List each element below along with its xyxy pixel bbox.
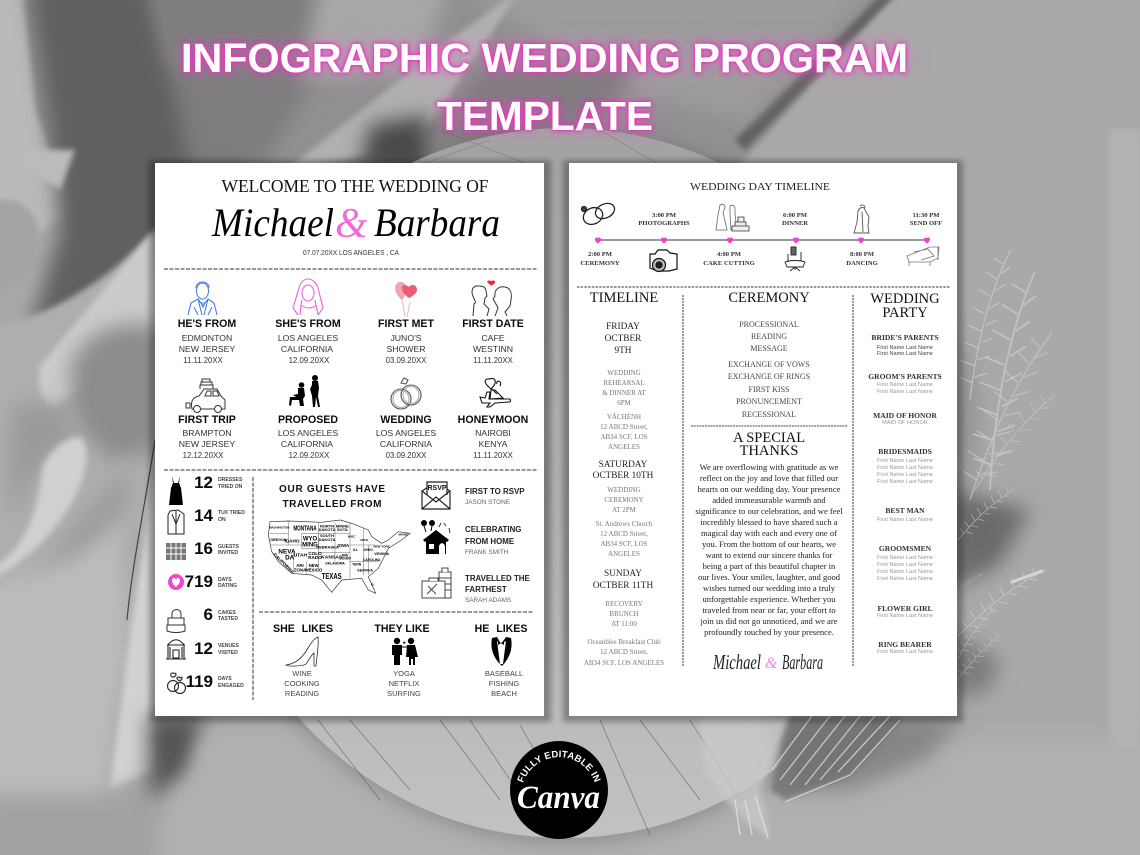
- icon: wedding rings: [391, 378, 421, 409]
- stat: tux tried on: 14: [194, 506, 214, 525]
- a special thanks: [695, 430, 843, 637]
- couple names: Barbara: [374, 200, 500, 245]
- column: timeline: AB34 SCF, LOS ANGELES: [584, 659, 664, 667]
- usa map: ZONA: [294, 568, 307, 573]
- they like: NETFLIX: [389, 679, 419, 688]
- stat: dresses tried on: 12: [194, 473, 213, 492]
- text: he's from: NEW JERSEY: [179, 344, 235, 354]
- text: first date: [462, 318, 524, 365]
- label: 2pm ceremony: [580, 251, 620, 267]
- stat: days dating: DATING: [218, 583, 237, 589]
- panel: right page, schedule: [569, 163, 957, 716]
- label: 6pm dinner: 6:00 PM: [783, 212, 808, 219]
- they like: YOGA: [393, 669, 415, 678]
- stat: days engaged: 119: [186, 672, 213, 691]
- text: travelled the farthest: FARTHEST: [465, 585, 507, 594]
- column: timeline: VÁCHÉNH: [607, 413, 641, 421]
- stat: days engaged: DAYS: [218, 676, 232, 682]
- label: 3pm photographs: 3:00 PM: [652, 212, 677, 219]
- text: she's from: LOS ANGELES: [278, 333, 338, 343]
- she likes: SHE LIKES: [273, 623, 333, 635]
- icon: bride: [293, 279, 323, 315]
- stat: guests invited: GUESTS: [218, 544, 240, 550]
- title: TEMPLATE: [437, 93, 653, 139]
- text: first met: [378, 318, 434, 365]
- usa map: SOURI: [339, 557, 351, 561]
- column: wedding party: First Name Last Name: [877, 345, 933, 351]
- column: wedding party: RING BEARER: [878, 640, 932, 649]
- stat: tux tried on: [168, 506, 245, 534]
- label: 6pm dinner: [782, 212, 808, 227]
- text: honeymoon: KENYA: [479, 439, 508, 449]
- column: ceremony: MESSAGE: [750, 344, 788, 353]
- text: travelled the farthest: [465, 574, 530, 604]
- stat: dresses tried on: TRIED ON: [218, 484, 243, 490]
- text: first to rsvp: JASON STONE: [465, 499, 510, 506]
- icon: rsvp envelope: RSVP: [427, 485, 447, 492]
- a special thanks: wishes turned our wedding into a truly: [703, 583, 836, 593]
- stat: days engaged: [168, 672, 244, 694]
- column: ceremony: CEREMONY: [728, 290, 810, 306]
- text: first trip: BRAMPTON: [182, 428, 232, 438]
- column: timeline: AT 2PM: [612, 506, 637, 514]
- he likes: BEACH: [491, 689, 517, 698]
- panel: left page, infographic: [155, 163, 544, 716]
- heading: welcome: WELCOME TO THE WEDDING OF: [222, 176, 489, 196]
- stat: tux tried on: TUX TRIED: [218, 510, 245, 516]
- usa map: SOUTH: [320, 533, 334, 538]
- column: wedding party: [868, 291, 942, 655]
- a special thanks: our lives. Your smiles, laughter, and good: [698, 572, 841, 582]
- usa map: MAINE: [399, 533, 408, 537]
- stat: days dating: [168, 572, 237, 591]
- badge: fully editable in canva: Canva: [517, 780, 600, 816]
- text: first to rsvp: FIRST TO RSVP: [465, 487, 524, 496]
- text: first date: WESTINN: [473, 344, 513, 354]
- a special thanks: A SPECIAL: [733, 430, 805, 446]
- column: wedding party: BRIDE'S PARENTS: [871, 333, 939, 342]
- usa map: MING: [302, 542, 318, 548]
- they like: SURFING: [387, 689, 421, 698]
- column: timeline: 9TH: [614, 346, 632, 356]
- he likes: FISHING: [489, 679, 519, 688]
- a special thanks: you. From the bottom of our hearts, we: [702, 539, 836, 549]
- text: wedding: [376, 414, 436, 460]
- column: timeline: RECOVERY: [605, 600, 643, 608]
- a special thanks: join us did not go unnoticed, and we are: [700, 616, 838, 626]
- title: [181, 35, 908, 139]
- text: first date: 11.11.20XX: [473, 356, 514, 365]
- usa map: MINNE: [336, 523, 349, 528]
- stat: venues visited: [166, 639, 240, 659]
- usa map: ILL: [353, 548, 358, 552]
- text: first date: CAFE: [481, 333, 505, 343]
- stat: venues visited: 12: [194, 639, 213, 658]
- text: he's from: EDMONTON: [182, 333, 232, 343]
- stat: guests invited: [166, 539, 240, 560]
- she likes: READING: [285, 689, 319, 698]
- timeline line with hearts: [595, 238, 930, 244]
- column: timeline: ANGELES: [608, 550, 640, 558]
- they like: [374, 623, 430, 698]
- text: celebrating from home: CELEBRATING: [465, 525, 521, 534]
- title: INFOGRAPHIC WEDDING PROGRAM: [181, 35, 908, 81]
- she likes: [273, 623, 333, 698]
- badge: fully editable in canva: [510, 741, 608, 839]
- text: first met: JUNO'S: [390, 333, 422, 343]
- text: he's from: 11.11.20XX: [183, 356, 224, 365]
- usa map: IDAHO: [284, 539, 300, 544]
- label: 4pm cake cutting: 4:00 PM: [717, 251, 742, 258]
- usa map: WASHINGTON: [269, 526, 289, 530]
- usa map: CAROLINA: [363, 558, 381, 562]
- date and place: 07.07.20XX LOS ANGELES , CA: [303, 248, 399, 257]
- label: 11:30pm send off: SEND OFF: [910, 220, 942, 227]
- stat: cakes tasted: TASTED: [218, 616, 238, 622]
- usa map: NEVA: [278, 549, 296, 556]
- text: celebrating from home: FROM HOME: [465, 537, 514, 546]
- column: ceremony: PROCESSIONAL: [739, 320, 799, 329]
- usa map: CALIFORNIA: [273, 552, 296, 575]
- column: timeline: FRIDAY: [606, 322, 640, 332]
- icon: plane with heart balloon: [480, 378, 510, 407]
- text: wedding: LOS ANGELES: [376, 428, 436, 438]
- column: wedding party: GROOMSMEN: [879, 544, 932, 553]
- label: 8pm dancing: DANCING: [846, 260, 878, 267]
- label: 11:30pm send off: [910, 212, 942, 227]
- column: timeline: 12 ABCD Street,: [600, 530, 648, 538]
- text: celebrating from home: FRANK SMITH: [465, 549, 509, 556]
- she likes: WINE: [292, 669, 312, 678]
- text: first trip: [178, 414, 236, 460]
- label: 2pm ceremony: CEREMONY: [580, 260, 620, 267]
- icon: couple and cake: [716, 204, 749, 231]
- column: wedding party: First Name Last Name: [877, 479, 933, 485]
- column: ceremony: FIRST KISS: [749, 385, 789, 394]
- usa map: NEBRASKA: [316, 544, 339, 549]
- column: timeline: REHEARSAL: [603, 379, 645, 387]
- usa map: ARI: [296, 563, 304, 568]
- stat: dresses tried on: DRESSES: [218, 477, 243, 483]
- icon: couple profiles with heart: [472, 281, 511, 316]
- icon: camera: [650, 250, 677, 272]
- column: timeline: CEREMONY: [604, 496, 644, 504]
- usa map: MEXICO: [305, 568, 323, 573]
- stat: cakes tasted: 6: [204, 605, 213, 624]
- a special thanks: hearts on our wedding day. Your presence: [698, 484, 841, 494]
- signature: [712, 650, 823, 674]
- column: wedding party: First Name Last Name: [877, 351, 933, 357]
- stat: guests invited: INVITED: [218, 550, 238, 556]
- a special thanks: traveled from near or far, your effort to: [702, 605, 836, 615]
- label: 3pm photographs: PHOTOGRAPHS: [638, 220, 690, 227]
- text: first met: 03.09.20XX: [386, 356, 427, 365]
- stat: cakes tasted: [167, 605, 238, 632]
- usa map: VIRGINIA: [374, 552, 390, 556]
- icon: rsvp envelope: [422, 482, 450, 509]
- usa map: [268, 520, 410, 593]
- label: 3pm photographs: [638, 212, 690, 227]
- text: wedding: WEDDING: [380, 414, 432, 426]
- usa map: OHIO: [364, 548, 373, 552]
- usa map: NEW YORK: [373, 545, 391, 549]
- stat: venues visited: VISITED: [218, 650, 238, 656]
- column: wedding party: FLOWER GIRL: [877, 604, 933, 613]
- text: travelled the farthest: SARAH ADAMS: [465, 597, 511, 604]
- icon: car with luggage: [186, 379, 225, 412]
- column: wedding party: BEST MAN: [885, 506, 925, 515]
- heading: guests travelled: TRAVELLED FROM: [282, 499, 382, 510]
- text: she's from: [275, 318, 341, 365]
- column: ceremony: EXCHANGE OF RINGS: [728, 372, 810, 381]
- usa map: UTAH: [294, 552, 307, 558]
- stat: days dating: 719: [185, 572, 213, 591]
- stat: days dating: DAYS: [218, 577, 232, 583]
- column: wedding party: First Name Last Name: [877, 472, 933, 478]
- text: first trip: NEW JERSEY: [179, 439, 235, 449]
- label: 2pm ceremony: 2:00 PM: [588, 251, 613, 258]
- column: timeline: OCTBER 10TH: [593, 471, 654, 481]
- label: 11:30pm send off: 11:30 PM: [913, 212, 940, 219]
- column: wedding party: First Name Last Name: [877, 649, 933, 655]
- column: timeline: AB34 SCF, LOS: [600, 540, 648, 548]
- icon: proposal silhouette: [289, 375, 320, 407]
- column: timeline: 12 ABCD Street,: [600, 648, 648, 656]
- text: honeymoon: [458, 414, 528, 460]
- usa map: IOWA: [338, 543, 350, 548]
- text: proposed: [278, 414, 338, 460]
- column: timeline: SATURDAY: [599, 460, 648, 470]
- column: timeline: OCTBER 11TH: [593, 581, 653, 591]
- badge: fully editable in canva: FULLY EDITABLE IN: [517, 750, 601, 782]
- label: 8pm dancing: 8:00 PM: [850, 251, 875, 258]
- usa map: MICH: [361, 538, 368, 542]
- icon: balloons: [395, 282, 417, 317]
- column: timeline: AT 11:00: [611, 620, 637, 628]
- they like: THEY LIKE: [374, 623, 430, 635]
- text: she's from: 12.09.20XX: [289, 356, 330, 365]
- text: proposed: 12.09.20XX: [289, 451, 330, 460]
- column: ceremony: [728, 290, 810, 419]
- label: 4pm cake cutting: CAKE CUTTING: [703, 260, 755, 267]
- column: wedding party: First Name Last Name: [877, 613, 933, 619]
- usa map: DAKOTA: [319, 537, 335, 542]
- usa map: WISC: [348, 535, 356, 539]
- usa map: MONTANA: [293, 525, 317, 532]
- column: timeline: St. Andrews Church: [596, 520, 653, 528]
- column: ceremony: RECESSIONAL: [742, 410, 796, 419]
- column: wedding party: PARTY: [882, 305, 928, 321]
- heading: guests travelled: [279, 484, 385, 510]
- text: first met: FIRST MET: [378, 318, 434, 330]
- stat: dresses tried on: [169, 473, 243, 505]
- text: wedding: CALIFORNIA: [380, 439, 432, 449]
- a special thanks: THANKS: [740, 443, 798, 459]
- usa map: WYO: [303, 536, 317, 542]
- column: timeline: Oceanbles Breakfast Club: [587, 638, 661, 646]
- usa map: TEXAS: [322, 571, 342, 581]
- stat: guests invited: 16: [194, 539, 213, 558]
- usa map: TENN: [352, 563, 362, 567]
- icon: dancing couple: [854, 205, 869, 233]
- text: she's from: SHE'S FROM: [275, 318, 341, 330]
- usa map: SOTA: [337, 527, 348, 532]
- column: timeline: [584, 290, 664, 667]
- text: proposed: LOS ANGELES: [278, 428, 338, 438]
- column: wedding party: First Name Last Name: [877, 389, 933, 395]
- stat: cakes tasted: CAKES: [218, 610, 236, 616]
- usa map: COLO: [308, 551, 322, 556]
- couple names: &: [335, 201, 368, 247]
- usa map: KANSAS: [321, 554, 343, 560]
- usa map: GEORGIA: [357, 569, 373, 573]
- usa map: OKLAHOMA: [325, 561, 345, 565]
- column: timeline: ANGELES: [608, 443, 640, 451]
- column: timeline: & DINNER AT: [602, 389, 646, 397]
- column: timeline: BRUNCH: [609, 610, 639, 618]
- text: proposed: PROPOSED: [278, 414, 338, 426]
- column: wedding party: GROOM'S PARENTS: [868, 372, 942, 381]
- column: timeline: TIMELINE: [590, 290, 658, 306]
- a special thanks: profoundly touched by your presence.: [704, 627, 834, 637]
- usa map: DA: [285, 554, 295, 561]
- a special thanks: incredibly blessed to have shared such a: [700, 517, 838, 527]
- a special thanks: unforgettable experience. Whether you: [702, 594, 836, 604]
- column: ceremony: EXCHANGE OF VOWS: [728, 360, 810, 369]
- column: timeline: WEDDING: [607, 369, 641, 377]
- stat: venues visited: VENUES: [218, 643, 240, 649]
- stat: tux tried on: ON: [218, 517, 226, 523]
- a special thanks: want to extend our sincere thanks for: [706, 550, 833, 560]
- icon: rings timeline: [581, 200, 617, 227]
- text: he's from: HE'S FROM: [178, 318, 236, 330]
- signature: &: [765, 655, 778, 672]
- icon: groom: [188, 282, 217, 315]
- column: timeline: 6PM: [617, 399, 632, 407]
- column: timeline: OCTBER: [605, 334, 642, 344]
- column: wedding party: First Name Last Name: [877, 576, 933, 582]
- column: wedding party: First Name Last Name: [877, 382, 933, 388]
- a special thanks: being a part of this beautiful chapter in: [703, 561, 836, 571]
- label: 8pm dancing: [846, 251, 878, 267]
- column: wedding party: First Name Last Name: [877, 465, 933, 471]
- heading: wedding day timeline: WEDDING DAY TIMELINE: [690, 182, 830, 193]
- text: she's from: CALIFORNIA: [281, 344, 333, 354]
- text: celebrating from home: [465, 525, 521, 556]
- label: 4pm cake cutting: [703, 251, 755, 267]
- signature: Barbara: [782, 650, 823, 674]
- icon: house with balloons: [421, 520, 450, 554]
- column: wedding party: BRIDESMAIDS: [878, 447, 932, 456]
- usa map: NORTH: [320, 523, 334, 528]
- signature: Michael: [712, 650, 761, 674]
- stat: days engaged: ENGAGED: [218, 683, 244, 689]
- text: first met: SHOWER: [386, 344, 426, 354]
- a special thanks: reflect on the joy and love that filled our: [700, 473, 838, 483]
- he likes: HE LIKES: [475, 623, 527, 635]
- couple names: Michael: [211, 200, 334, 245]
- text: proposed: CALIFORNIA: [281, 439, 333, 449]
- a special thanks: significance to our celebration, and we feel: [695, 506, 843, 516]
- text: first to rsvp: [465, 487, 524, 506]
- he likes: [475, 623, 527, 698]
- text: first trip: 12.12.20XX: [183, 451, 224, 460]
- text: honeymoon: NAIROBI: [475, 428, 511, 438]
- text: honeymoon: 11.11.20XX: [473, 451, 514, 460]
- text: honeymoon: HONEYMOON: [458, 414, 528, 426]
- column: timeline: WEDDING: [607, 486, 641, 494]
- icon: luggage: [422, 568, 451, 598]
- icon: dinner table: [785, 247, 805, 271]
- column: wedding party: First Name Last Name: [877, 562, 933, 568]
- a special thanks: added immeasurable warmth and: [712, 495, 826, 505]
- a special thanks: We are overflowing with gratitude as we: [700, 462, 839, 472]
- usa map: NEW: [309, 563, 320, 568]
- usa map: FL: [371, 583, 375, 587]
- a special thanks: magical day with each and every one of: [701, 528, 837, 538]
- text: first date: FIRST DATE: [462, 318, 524, 330]
- column: wedding party: MAID OF HONOR: [873, 411, 937, 420]
- column: ceremony: PRONUNCEMENT: [736, 397, 802, 406]
- column: wedding party: WEDDING: [870, 291, 940, 307]
- text: wedding: 03.09.20XX: [386, 451, 427, 460]
- usa map: DAKOTA: [319, 527, 335, 532]
- column: wedding party: First Name Last Name: [877, 517, 933, 523]
- couple names: [211, 200, 500, 247]
- column: ceremony: READING: [751, 332, 787, 341]
- column: timeline: SUNDAY: [604, 569, 642, 579]
- text: he's from: [178, 318, 236, 365]
- heading: guests travelled: OUR GUESTS HAVE: [279, 484, 385, 495]
- he likes: BASEBALL: [485, 669, 523, 678]
- column: timeline: 12 ABCD Street,: [600, 423, 648, 431]
- text: travelled the farthest: TRAVELLED THE: [465, 574, 530, 583]
- column: wedding party: First Name Last Name: [877, 555, 933, 561]
- column: wedding party: MAID OF HONOR: [882, 420, 928, 426]
- text: first trip: FIRST TRIP: [178, 414, 236, 426]
- column: timeline: AB34 SCF, LOS: [600, 433, 648, 441]
- usa map: OREGON: [270, 538, 287, 542]
- icon: bed: [907, 247, 939, 266]
- usa map: MIS: [342, 553, 349, 557]
- column: wedding party: First Name Last Name: [877, 569, 933, 575]
- column: wedding party: First Name Last Name: [877, 458, 933, 464]
- she likes: COOKING: [284, 679, 320, 688]
- usa map: RADO: [308, 555, 322, 560]
- label: 6pm dinner: DINNER: [782, 220, 808, 227]
